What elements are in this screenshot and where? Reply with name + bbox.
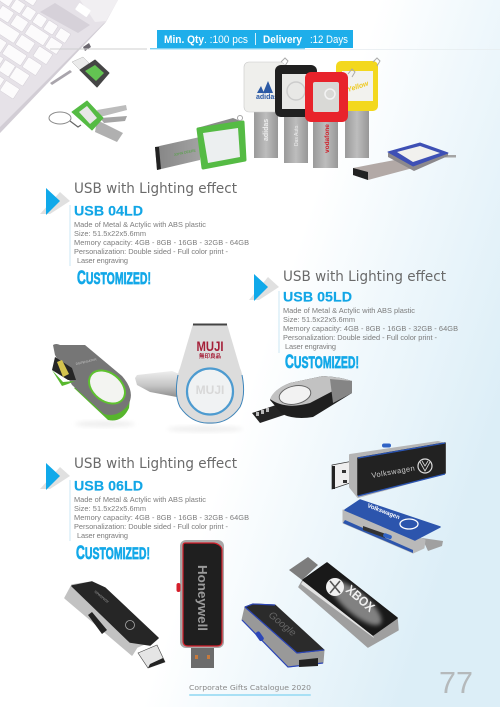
footer: catalogue title bbox=[189, 684, 311, 696]
specifications: Laser engraving bbox=[77, 256, 128, 265]
customized badge: CUSTOMIZED! bbox=[77, 267, 151, 289]
specifications: Made of Metal & Actylic with ABS plastic bbox=[74, 495, 206, 504]
header: quantity and delivery bar: :12 Days bbox=[310, 34, 348, 46]
photo: green USB large bbox=[155, 116, 245, 170]
photo: yellow USB bbox=[336, 58, 380, 158]
arrow icon bbox=[249, 274, 279, 301]
photo: Honeywell USB: Honeywell bbox=[195, 565, 210, 631]
specifications: Size: 51.5x22x5.6mm bbox=[74, 229, 146, 238]
photo: green USB large: JOHN DEERE bbox=[173, 148, 197, 157]
specifications: Memory capacity: 4GB - 8GB - 16GB - 32GB - 64GB bbox=[74, 513, 249, 522]
photo: blue Volkswagen USB: Volkswagen bbox=[366, 503, 401, 521]
section 3: USB 06LD bbox=[40, 456, 249, 564]
specifications: Size: 51.5x22x5.6mm bbox=[74, 504, 146, 513]
specifications bbox=[74, 495, 249, 540]
footer: catalogue title: Corporate Gifts Catalogue 2020 bbox=[189, 684, 311, 692]
specifications: Memory capacity: 4GB - 8GB - 16GB - 32GB - 64GB bbox=[74, 238, 249, 247]
photo: green loop USB: DISPENSATOR bbox=[75, 357, 98, 366]
photo: MUJI USB: MUJI bbox=[196, 383, 224, 397]
header: quantity and delivery bar bbox=[50, 30, 500, 50]
divider bbox=[278, 291, 280, 353]
photo: XBOX USB bbox=[289, 557, 398, 647]
photo: white adidas USB bbox=[244, 58, 288, 158]
photo: MUJI USB: 無印良品 bbox=[199, 352, 221, 360]
photo: black VW USB: Das Auto. bbox=[294, 124, 300, 146]
customized badge: CUSTOMIZED! bbox=[76, 542, 150, 564]
photo: black Volkswagen USB bbox=[332, 442, 445, 497]
photo: blue frame USB bbox=[353, 143, 456, 180]
divider bbox=[70, 205, 71, 266]
header: quantity and delivery bar: Min. Qty bbox=[164, 34, 205, 46]
photo: black USB with silver sides: IWWWWW bbox=[93, 590, 110, 604]
photo: XBOX USB: XBOX bbox=[343, 582, 378, 615]
photo: white adidas USB: adidas bbox=[263, 119, 270, 141]
specifications: Memory capacity: 4GB - 8GB - 16GB - 32GB - 64GB bbox=[283, 324, 458, 333]
specifications: Personalization: Double sided - Full color print - bbox=[74, 522, 229, 531]
heading: USB with Lighting effect bbox=[283, 269, 446, 285]
specifications bbox=[283, 306, 458, 351]
photo: black USB with silver sides bbox=[65, 582, 165, 668]
model name: USB 04LD bbox=[74, 202, 143, 218]
header: quantity and delivery bar: Delivery bbox=[263, 34, 303, 46]
specifications: Made of Metal & Actylic with ABS plastic bbox=[74, 220, 206, 229]
specifications: Personalization: Double sided - Full color print - bbox=[74, 247, 229, 256]
model name: USB 05LD bbox=[283, 288, 352, 304]
photo: green loop USB bbox=[52, 344, 135, 427]
section 1: USB 04LD bbox=[40, 181, 249, 289]
arrow icon bbox=[40, 188, 70, 215]
photo: Google USB bbox=[242, 604, 324, 667]
specifications bbox=[74, 220, 249, 265]
photo: black VW USB bbox=[275, 65, 317, 163]
specifications: Size: 51.5x22x5.6mm bbox=[283, 315, 355, 324]
photo: black Volkswagen USB: Volkswagen bbox=[371, 463, 416, 480]
photo: MUJI USB: MUJI bbox=[196, 338, 224, 354]
photo: Honeywell USB bbox=[176, 540, 224, 668]
photo: red vodafone USB bbox=[305, 69, 355, 168]
divider bbox=[70, 480, 71, 541]
specifications: Made of Metal & Actylic with ABS plastic bbox=[283, 306, 415, 315]
heading: USB with Lighting effect bbox=[74, 456, 237, 472]
photo: Google USB: Google bbox=[266, 610, 298, 639]
page number: 77 bbox=[439, 665, 473, 700]
photo: red vodafone USB: vodafone bbox=[324, 124, 331, 153]
customized badge: CUSTOMIZED! bbox=[285, 351, 359, 373]
specifications: Personalization: Double sided - Full color print - bbox=[283, 333, 438, 342]
header: quantity and delivery bar: . :100 pcs bbox=[204, 34, 248, 46]
photo: white adidas USB: adidas bbox=[256, 94, 278, 101]
photo: laptop with green USB bbox=[0, 0, 118, 133]
heading: USB with Lighting effect bbox=[74, 181, 237, 197]
photo: MUJI USB bbox=[135, 324, 244, 432]
model name: USB 06LD bbox=[74, 478, 143, 494]
photo: green USB on keychain bbox=[49, 101, 127, 142]
section 2: USB 05LD bbox=[249, 269, 458, 373]
specifications: Laser engraving bbox=[285, 342, 336, 351]
arrow icon bbox=[40, 463, 70, 490]
specifications: Laser engraving bbox=[77, 531, 128, 540]
photo: yellow USB: Yellow bbox=[346, 80, 370, 94]
photo: blue Volkswagen USB bbox=[343, 500, 443, 553]
photo: silver and black USB bbox=[252, 376, 352, 423]
